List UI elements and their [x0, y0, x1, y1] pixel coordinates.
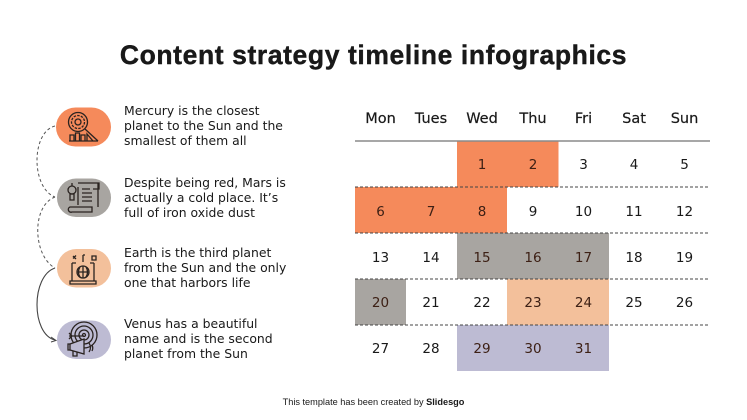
dates: 10: [575, 204, 592, 220]
title: Content strategy timeline infographics: [120, 40, 627, 70]
icon: lavender target badge: [57, 320, 111, 359]
dates: 13: [372, 250, 389, 266]
icon: peach globe badge: [57, 249, 111, 288]
footer credit: This template has been created by Slidesgo: [283, 397, 465, 407]
dates: 28: [422, 341, 440, 357]
text: Venus: [124, 316, 273, 361]
dates: 4: [630, 157, 638, 173]
text: Mars: Despite being red, Mars is: [124, 175, 286, 190]
dates: 8: [478, 204, 486, 220]
weekday headers: Thu: [518, 111, 547, 127]
dates: 27: [372, 341, 389, 357]
text: Venus: name and is the second: [124, 331, 273, 346]
dates: [372, 157, 693, 357]
dates: 16: [524, 250, 542, 266]
text: Mercury: smallest of them all: [124, 133, 247, 148]
text: Venus: Venus has a beautiful: [124, 316, 258, 331]
dates: 1: [478, 157, 486, 173]
weekday headers: Fri: [575, 111, 592, 127]
text: Mars: full of iron oxide dust: [124, 205, 255, 220]
dates: 19: [676, 250, 693, 266]
connector: dashed middle: [38, 197, 55, 268]
dates: 9: [529, 204, 537, 220]
dates: 6: [376, 204, 385, 220]
connector: solid arrow: [37, 268, 56, 342]
dates: 18: [625, 250, 643, 266]
dates: 21: [422, 295, 440, 311]
text: Earth: from the Sun and the only: [124, 260, 286, 275]
calendar: [355, 111, 710, 371]
text: Venus: planet from the Sun: [124, 346, 248, 361]
dates: 11: [625, 204, 643, 220]
dates: 2: [529, 157, 537, 173]
dates: 31: [575, 341, 592, 357]
dates: 17: [575, 250, 592, 266]
weekday headers: [365, 111, 698, 127]
dates: 26: [676, 295, 693, 311]
weekday headers: Wed: [466, 111, 498, 127]
weekday headers: Sat: [622, 111, 646, 127]
dates: 29: [473, 341, 491, 357]
dates: 3: [579, 157, 588, 173]
dates: 15: [473, 250, 491, 266]
dates: 24: [575, 295, 592, 311]
text: Mars: [124, 175, 286, 220]
text: Earth: Earth is the third planet: [124, 245, 271, 260]
highlighted cells: [355, 141, 609, 371]
dates: 5: [680, 157, 689, 173]
dates: 20: [372, 295, 389, 311]
weekday headers: Mon: [365, 111, 396, 127]
icon: orange magnifier badge: [56, 108, 111, 146]
text: Earth: [124, 245, 286, 290]
text: Mercury: planet to the Sun and the: [124, 118, 283, 133]
dates: 12: [676, 204, 693, 220]
dates: 23: [524, 295, 542, 311]
text: Mercury: Mercury is the closest: [124, 103, 260, 118]
weekday headers: Tues: [414, 111, 447, 127]
dates: 22: [473, 295, 491, 311]
icon: grey document badge: [57, 178, 111, 217]
connector: dashed top: [37, 126, 55, 197]
dates: 14: [422, 250, 440, 266]
text: Mercury: [124, 103, 283, 148]
weekday headers: Sun: [671, 111, 698, 127]
text: Earth: one that harbors life: [124, 275, 250, 290]
text: Mars: actually a cold place. It’s: [124, 190, 278, 205]
dates: 7: [427, 204, 435, 220]
dates: 30: [524, 341, 542, 357]
dates: 25: [625, 295, 643, 311]
